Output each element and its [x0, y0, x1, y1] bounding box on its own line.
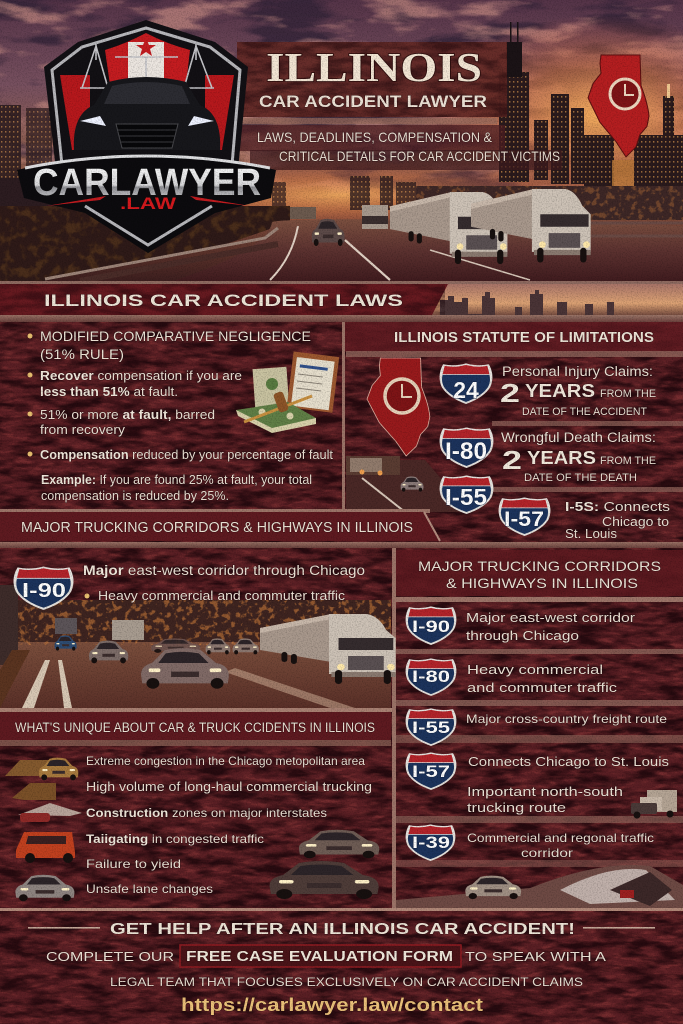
row: I-39	[406, 824, 654, 861]
list items: Failure to yieid	[86, 857, 181, 871]
footer heading: GET HELP AFTER AN ILLINOIS CAR ACCIDENT!	[110, 921, 575, 938]
row: I-57: Important north-south	[467, 784, 623, 799]
logo: CarLawyer.law shield	[17, 20, 276, 253]
heading: corridors two lines: MAJOR TRUCKING CORRIDORS	[418, 558, 661, 574]
deadline: wrongful death: 2	[502, 445, 522, 475]
note: I-5S: St. Louis	[565, 527, 617, 541]
crash scene	[396, 865, 683, 908]
row: I-55	[406, 708, 667, 746]
row: I-90: I-90	[412, 617, 450, 636]
row: I-80: I-80	[412, 667, 450, 686]
trucking corridors banner	[0, 509, 440, 541]
icon: Illinois map with clock	[588, 55, 649, 157]
deadline: personal injury: Personal Injury Claims:	[502, 364, 653, 379]
row: I-39: Commercial and regonal traffic	[467, 831, 654, 845]
row: I-80: and commuter traffic	[467, 680, 618, 695]
heading: unique: WHAT'S UNIQUE ABOUT CAR & TRUCK CCIDENTS IN ILLINOIS	[15, 720, 375, 735]
highway shield I-55	[440, 475, 493, 514]
icon: Illinois map	[367, 358, 430, 456]
deadline: personal injury: DATE OF THE ACCIDENT	[522, 406, 647, 418]
rule heading	[28, 328, 311, 362]
icon: I-90 shield	[13, 566, 74, 610]
deadline: personal injury: YEARS	[525, 381, 595, 401]
icon: delivery truck	[631, 790, 677, 818]
panel: what's unique	[0, 712, 391, 901]
tagline line 2: CRITICAL DETAILS FOR CAR ACCIDENT VICTIMS	[279, 148, 560, 164]
bullet: recover	[28, 368, 242, 399]
bullet: recover: Recover compensation if you are	[40, 368, 242, 383]
heading: corridors two lines: & HIGHWAYS IN ILLINOIS	[446, 575, 638, 591]
panel: I-90 traffic photo	[0, 563, 396, 708]
row: I-80	[406, 658, 618, 696]
subheading: car accident lawyer: CAR ACCIDENT LAWYER	[259, 92, 487, 111]
dividers	[0, 315, 683, 322]
bullet: barred	[28, 407, 215, 437]
icon: scales of justice	[80, 44, 214, 88]
deadline: personal injury	[500, 364, 656, 418]
icon: documents, gavel and cash	[236, 352, 339, 433]
highway shield I-80	[440, 427, 493, 468]
list items: Extreme congestion in the Chicago metopolitan area	[86, 754, 365, 768]
example: compensation is reduced by 25%.	[41, 489, 229, 503]
deadline: wrongful death	[501, 430, 656, 484]
road photo	[346, 456, 470, 512]
banner	[17, 154, 276, 253]
bullet: barred: from recovery	[40, 422, 126, 437]
heading: corridors: MAJOR TRUCKING CORRIDORS & HIGHWAYS IN ILLINOIS	[21, 520, 413, 536]
row: I-57: I-57	[412, 762, 450, 781]
list items: Taiigating in congested traffic	[86, 832, 264, 846]
header scene	[0, 0, 683, 282]
rule heading: (51% RULE)	[40, 346, 124, 362]
deadline: wrongful death: FROM THE	[600, 455, 656, 467]
highway shield I-57: I-57	[504, 508, 544, 531]
heading: statute: ILLINOIS STATUTE OF LIMITATIONS	[394, 330, 654, 346]
bullet: compensation: Compensation reduced by your percentage of fault	[40, 447, 333, 462]
icon: flag crest	[105, 33, 190, 85]
example: Example: If you are found 25% at fault, your total	[41, 473, 312, 487]
panel: statute of limitations	[345, 322, 683, 541]
deadline: personal injury: FROM THE	[600, 388, 656, 400]
laws banner	[0, 281, 683, 319]
city skyline	[0, 22, 683, 220]
row: I-90	[406, 606, 635, 645]
deadline: wrongful death: Wrongful Death Claims:	[501, 430, 656, 445]
main background texture	[0, 282, 683, 1024]
row: I-55: I-55	[412, 718, 450, 737]
tagline line 1: LAWS, DEADLINES, COMPENSATION &	[257, 129, 493, 145]
logo wordmark: CARLAWYER	[33, 162, 261, 204]
icon: car front	[74, 77, 220, 150]
heading: corridors two lines	[418, 558, 661, 591]
row: I-90: Major east-west corridor	[466, 611, 635, 625]
footer call to action	[28, 921, 655, 1015]
row: I-39: I-39	[412, 833, 450, 852]
deadline: wrongful death: YEARS	[527, 448, 596, 468]
row: I-57: Connects Chicago to St. Louis	[468, 754, 670, 769]
call to action line 1	[46, 945, 606, 967]
highway shield 24: 24	[453, 377, 479, 403]
logo suffix: .LAW	[120, 194, 177, 213]
highway shield I-57	[499, 497, 550, 536]
bullet: recover: less than 51% at fault.	[40, 384, 178, 399]
road photo	[0, 585, 396, 708]
bullet: barred: 51% or more at fault, barred	[40, 407, 215, 422]
row: I-90: through Chicago	[466, 629, 579, 643]
note: I-5S	[565, 499, 671, 541]
call to action line 1: FREE CASE EVALUATION FORM	[186, 949, 453, 965]
deadline: wrongful death: DATE OF THE DEATH	[524, 472, 637, 484]
heading: Illinois car accident laws: ILLINOIS CAR ACCIDENT LAWS	[44, 291, 403, 310]
highway shield I-80: I-80	[445, 438, 487, 465]
footer band	[0, 908, 683, 911]
row: I-57	[406, 752, 670, 815]
rule heading: MODIFIED COMPARATIVE NEGLIGENCE	[40, 328, 311, 344]
foliage and road	[0, 206, 290, 282]
example	[41, 473, 312, 503]
highway shield I-55: I-55	[445, 484, 487, 510]
call to action line 1: TO SPEAK WITH A	[465, 949, 606, 964]
note: I-5S: Chicago to	[602, 515, 669, 529]
heading: Illinois: ILLINOIS	[266, 44, 482, 90]
traffic	[290, 189, 591, 264]
list items: Unsafe lane changes	[86, 882, 213, 896]
text: heavy traffic: Heavy commercial and commuter traffic	[98, 589, 345, 603]
panel: corridors list	[396, 550, 683, 908]
row: I-55: Major cross-country freight route	[466, 712, 667, 726]
icon: traffic	[55, 614, 396, 689]
call to action line 1: COMPLETE OUR	[46, 949, 174, 964]
row: I-39: corridor	[521, 846, 573, 860]
panel: comparative negligence	[28, 328, 339, 503]
note: I-5S: I-5S: Connects	[565, 499, 671, 514]
icons: vehicles	[5, 758, 379, 901]
deadline: personal injury: 2	[500, 378, 520, 408]
text: major corridor: Major east-west corridor through Chicago	[83, 563, 365, 578]
contact URL: https://carlawyer.law/contact	[181, 995, 483, 1015]
highway shield 24	[440, 363, 492, 404]
icon: I-90 shield: I-90	[22, 580, 66, 602]
list items: High volume of long-haul commercial trucking	[86, 780, 372, 794]
list items: Construction zones on major interstates	[86, 806, 327, 820]
title plate	[237, 42, 562, 170]
call to action line 2: LEGAL TEAM THAT FOCUSES EXCLUSIVELY ON CAR ACCIDENT CLAIMS	[110, 975, 583, 989]
row: I-80: Heavy commercial	[467, 662, 603, 677]
skyline strip	[432, 284, 683, 319]
row: I-57: trucking route	[467, 800, 566, 815]
list items	[86, 754, 372, 896]
